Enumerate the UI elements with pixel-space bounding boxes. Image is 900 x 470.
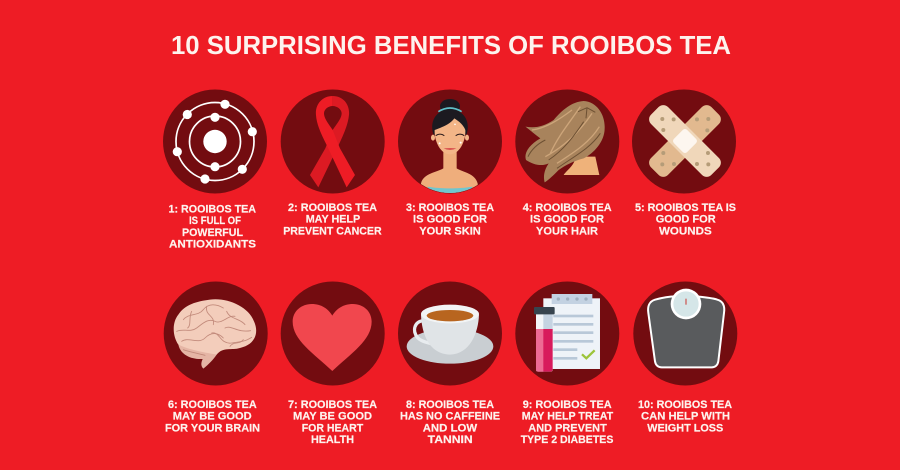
caption 5 — [635, 202, 736, 237]
caption 7: HEALTH — [311, 434, 354, 446]
panel: benefit 4 hair — [515, 90, 619, 237]
icon: awareness ribbon — [281, 90, 385, 194]
title: 10 SURPRISING BENEFITS OF ROOIBOS TEA — [171, 30, 731, 60]
caption 2: 2: ROOIBOS TEA — [288, 202, 377, 214]
caption 8 — [400, 399, 500, 446]
caption 1: IS FULL OF — [189, 215, 241, 227]
caption 6: 6: ROOIBOS TEA — [168, 399, 257, 411]
panel: benefit 3 skin — [398, 90, 502, 237]
panel: benefit 6 brain — [164, 282, 268, 434]
panel: benefit 1 antioxidants — [163, 90, 267, 250]
icon: woman's face — [398, 90, 502, 195]
caption 5: GOOD FOR — [656, 214, 716, 226]
caption 5: WOUNDS — [659, 225, 712, 237]
caption 2: MAY HELP — [306, 214, 361, 226]
icon: bathroom scale — [633, 282, 737, 386]
panel: benefit 10 weight loss — [633, 282, 737, 434]
caption 3: 3: ROOIBOS TEA — [406, 202, 494, 214]
icon: crossed plasters — [632, 90, 736, 194]
panel: benefit 2 cancer — [281, 90, 385, 237]
caption 1: POWERFUL — [182, 227, 243, 239]
caption 10 — [638, 399, 732, 434]
caption 8: AND LOW — [423, 422, 477, 434]
caption 9: AND PREVENT — [528, 422, 607, 434]
caption 4: IS GOOD FOR — [530, 214, 604, 226]
caption 2 — [283, 202, 382, 237]
caption 3 — [406, 202, 494, 237]
caption 9: MAY HELP TREAT — [522, 411, 613, 423]
icon: heart — [281, 282, 385, 386]
caption 1: ANTIOXIDANTS — [169, 238, 256, 250]
caption 3: YOUR SKIN — [419, 225, 481, 237]
caption 5: 5: ROOIBOS TEA IS — [635, 202, 736, 214]
caption 8: TANNIN — [428, 434, 473, 446]
caption 4 — [523, 202, 612, 237]
caption 4: 4: ROOIBOS TEA — [523, 202, 612, 214]
infographic canvas — [163, 36, 738, 444]
caption 9: TYPE 2 DIABETES — [521, 434, 614, 446]
panel: benefit 8 caffeine — [398, 282, 502, 446]
panel: benefit 9 diabetes — [515, 282, 619, 446]
icon: brain — [164, 282, 268, 386]
caption 1 — [168, 203, 256, 250]
panel: benefit 7 heart — [281, 282, 385, 446]
caption 10: CAN HELP WITH — [641, 411, 730, 423]
caption 9 — [521, 399, 614, 446]
icon: atom — [163, 90, 267, 194]
caption 1: 1: ROOIBOS TEA — [168, 203, 256, 215]
panel: benefit 5 wounds — [632, 90, 736, 237]
icon: test tube and report — [515, 282, 619, 386]
caption 4: YOUR HAIR — [536, 225, 598, 237]
caption 2: PREVENT CANCER — [283, 225, 382, 237]
caption 9: 9: ROOIBOS TEA — [523, 399, 612, 411]
icon: tea cup and saucer — [398, 282, 502, 386]
caption 6 — [165, 399, 260, 434]
caption 8: 8: ROOIBOS TEA — [406, 399, 494, 411]
icon: hair from behind — [515, 90, 619, 194]
caption 7: MAY BE GOOD — [293, 411, 372, 423]
caption 3: IS GOOD FOR — [413, 214, 487, 226]
caption 8: HAS NO CAFFEINE — [400, 411, 500, 423]
caption 7: 7: ROOIBOS TEA — [288, 399, 377, 411]
caption 10: 10: ROOIBOS TEA — [638, 399, 732, 411]
caption 6: MAY BE GOOD — [173, 411, 252, 423]
caption 6: FOR YOUR BRAIN — [165, 422, 260, 434]
caption 7: FOR HEART — [302, 422, 363, 434]
caption 7 — [288, 399, 377, 446]
caption 10: WEIGHT LOSS — [647, 422, 724, 434]
